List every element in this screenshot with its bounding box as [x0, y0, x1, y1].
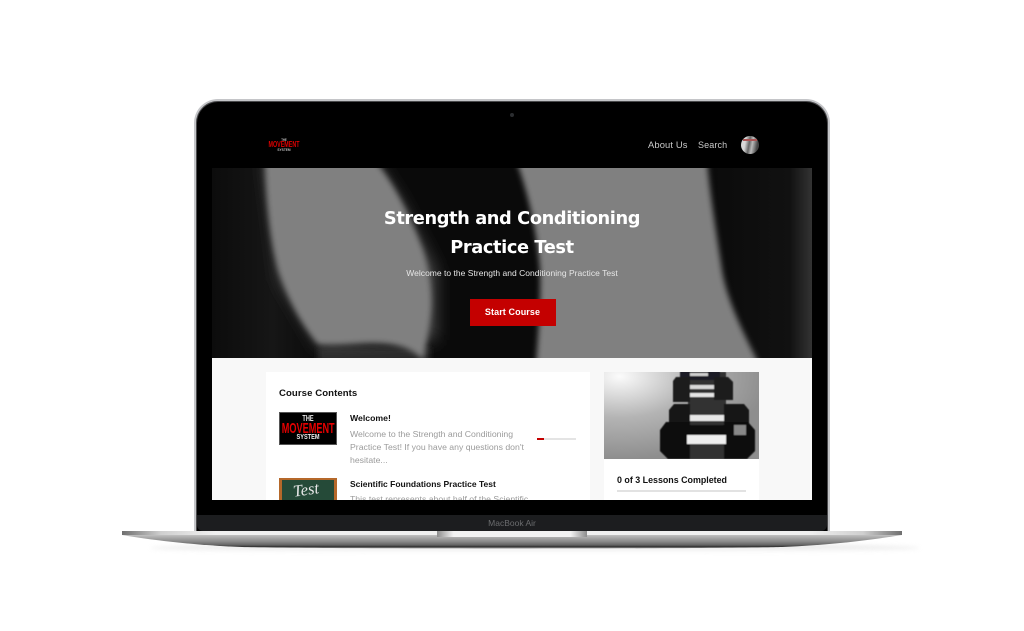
button: Start Course	[470, 299, 556, 326]
handles	[690, 373, 708, 376]
button: Start Course: Start Course	[485, 307, 540, 317]
user avatar	[741, 136, 759, 154]
lesson description: hesitate...	[350, 455, 388, 465]
lesson thumbnail: chalkboard test	[279, 478, 337, 511]
site logo: THE	[281, 137, 287, 142]
hero title: Practice Test	[450, 237, 574, 258]
panel: progress sidebar	[604, 372, 759, 502]
lower bezel: MacBook Air label: MacBook Air	[488, 518, 536, 528]
heading: Course Contents: Course Contents	[279, 388, 357, 398]
nav link: Search: Search	[698, 140, 727, 150]
hero title	[384, 208, 640, 258]
progress bar	[537, 438, 576, 440]
third dumbbell heads	[673, 377, 690, 402]
base top highlight	[122, 531, 902, 535]
base body	[122, 531, 902, 548]
second dumbbell heads	[669, 404, 690, 425]
laptop base	[122, 531, 902, 548]
lesson thumbnail: The Movement System	[279, 412, 337, 445]
laptop lid	[194, 99, 830, 535]
hinge notch	[437, 531, 587, 537]
lesson title: Scientific Foundations: Scientific Foundations Practice Test	[350, 479, 496, 489]
lesson description: Welcome to the Strength and Conditioning	[350, 429, 513, 439]
rack spine	[688, 372, 726, 459]
progress label: 0 of 3 Lessons Completed	[617, 474, 727, 484]
nav link: About Us: About Us	[648, 139, 688, 150]
lesson description: Practice Test! If you have any questions don't	[350, 442, 524, 452]
base shadow	[150, 543, 920, 553]
front dumbbell heads	[660, 422, 690, 459]
hero subtitle: Welcome to the Strength and Conditioning Practice Test	[406, 268, 618, 278]
lesson thumbnail: The Movement System: THE	[302, 414, 314, 423]
sidebar progress track	[617, 490, 746, 492]
hero background image	[242, 168, 812, 358]
site logo: SYSTEM	[277, 147, 291, 152]
site logo	[268, 137, 300, 152]
back dumbbell	[680, 370, 720, 380]
site logo: MOVEMENT	[269, 140, 299, 149]
panel: course contents	[266, 372, 590, 502]
camera	[510, 113, 514, 117]
lesson title: Welcome!: Welcome!	[350, 413, 391, 423]
hero title: Strength and Conditioning	[384, 208, 640, 228]
lesson thumbnail: The Movement System: SYSTEM	[296, 434, 320, 441]
lesson thumbnail: The Movement System: MOVEMENT	[282, 420, 335, 437]
lower bezel: MacBook Air label	[197, 515, 827, 531]
lesson description	[350, 429, 524, 465]
content area	[212, 358, 812, 500]
dumbbell photo	[604, 372, 759, 459]
hero banner	[212, 168, 812, 358]
